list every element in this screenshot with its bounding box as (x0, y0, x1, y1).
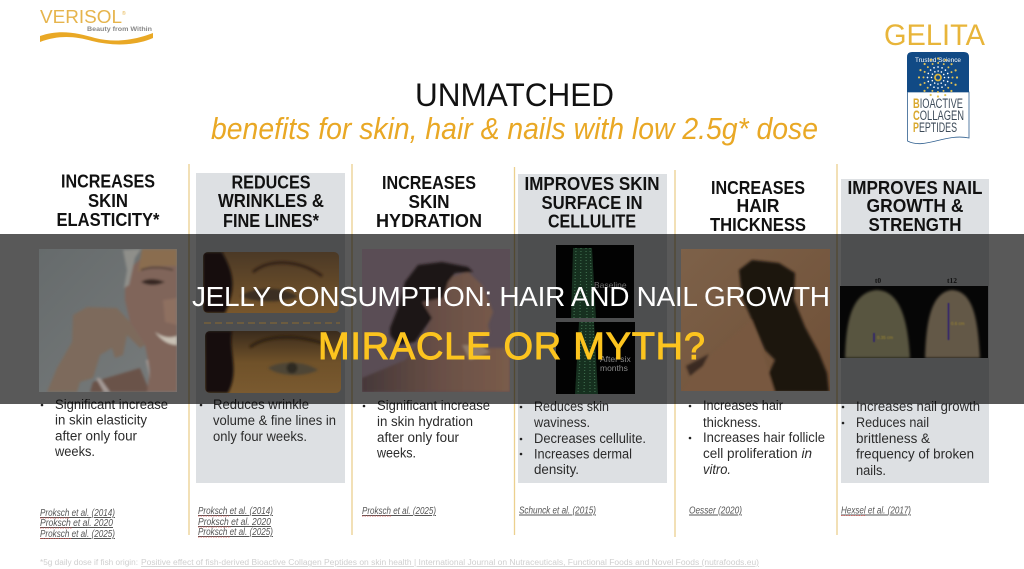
text: skin elasticity bullets: in skin elasticity (55, 412, 147, 428)
photo: nails before and after (840, 276, 988, 358)
heading: increases skin hydration: SKIN (408, 192, 450, 212)
heading: increases hair thickness: HAIR (736, 196, 780, 216)
overlay headline: line 2: MIRACLE OR MYTH? (318, 326, 705, 368)
logo: Gelita with collagen badge: GELITA (884, 19, 985, 52)
references: cellulite: Schunck et al. (2015) (519, 506, 596, 516)
text: nail bullets (842, 399, 980, 478)
footnote: *5g daily dose if fish origin: (40, 558, 138, 567)
text: wrinkles bullets: Reduces wrinkle (213, 397, 309, 412)
heading: reduces wrinkles and fine lines: WRINKLES & (218, 191, 324, 211)
badge: Bioactive Collagen Peptides (907, 52, 969, 144)
heading: increases skin elasticity: INCREASES (61, 172, 155, 192)
text: nail bullets: nails. (856, 463, 886, 478)
text: hair bullets: thickness. (703, 415, 761, 430)
divider: before and after (204, 322, 340, 324)
text: cellulite bullets (520, 399, 646, 477)
references: skin elasticity: Proksch et al. 2020 (40, 518, 113, 529)
badge: Bioactive Collagen Peptides: Trusted Science (915, 57, 961, 64)
text: cellulite bullets: Reduces skin (534, 399, 609, 414)
heading: improves skin surface in cellulite: SURFACE IN (542, 193, 642, 213)
references: wrinkles: Proksch et al. 2020 (198, 517, 271, 528)
badge: Bioactive Collagen Peptides: COLLAGEN (913, 108, 964, 123)
text: wrinkles bullets: volume & fine lines in (213, 413, 336, 428)
heading: improves skin surface in cellulite: CELLULITE (548, 212, 636, 232)
heading: increases skin hydration: INCREASES (382, 173, 476, 193)
photo: nails before and after: 0.35 cm (877, 335, 893, 340)
heading: reduces wrinkles and fine lines: REDUCES (232, 172, 310, 192)
text: nail bullets: Increases nail growth (856, 399, 980, 414)
heading: increases skin hydration: HYDRATION (376, 211, 482, 231)
logo: Verisol: ® (122, 10, 126, 17)
heading: improves nail growth and strength: GROWTH & (866, 196, 964, 216)
text: hair bullets: Increases hair (703, 398, 784, 413)
photo: nails before and after: 0.6 cm (951, 321, 965, 326)
photo: woman with curly hair (681, 249, 830, 392)
title: UNMATCHED (415, 77, 614, 113)
dark title band (0, 234, 1024, 404)
photo: cellulite baseline scan: Baseline (594, 280, 627, 290)
text: cellulite bullets: Increases dermal (534, 446, 632, 462)
references: skin elasticity: Proksch et al. (2014) (40, 508, 115, 519)
badge: Bioactive Collagen Peptides: PEPTIDES (913, 120, 957, 135)
references: wrinkles (198, 506, 273, 538)
text: hair bullets (689, 398, 825, 477)
text: hydration bullets: in skin hydration (377, 414, 473, 429)
text: hydration bullets: weeks. (376, 446, 416, 460)
photo: eye after (205, 331, 341, 393)
heading: improves skin surface in cellulite: IMPROVES SKIN (524, 174, 660, 194)
badge: Bioactive Collagen Peptides: BIOACTIVE (913, 96, 963, 111)
photo: woman touching cheek (39, 249, 177, 392)
heading: improves nail growth and strength (848, 178, 983, 235)
text: nail bullets: frequency of broken (856, 446, 974, 462)
text: hydration bullets: Significant increase (377, 398, 490, 413)
text: cellulite bullets: Decreases cellulite. (534, 431, 646, 446)
footnote: Positive effect of fish-derived Bioactive Collagen Peptides on skin health | International Journal on Nutraceuticals, Functional Foods and Novel Foods (nutrafoods.eu) (141, 558, 759, 567)
text: skin elasticity bullets: weeks. (54, 444, 95, 459)
text: hair bullets: Increases hair follicle (703, 430, 825, 445)
text: nail bullets: Reduces nail (856, 415, 929, 430)
photo: nails before and after: t12 (947, 276, 957, 285)
heading: increases hair thickness (710, 178, 806, 235)
text: hydration bullets: after only four (377, 430, 460, 445)
heading: improves nail growth and strength: STRENGTH (868, 215, 962, 235)
photo: cellulite after six months scan (556, 322, 635, 394)
logo: Verisol: Beauty from Within (87, 26, 152, 33)
logo: Verisol: VERISOL (40, 6, 122, 27)
logo: Gelita with collagen badge (884, 19, 985, 144)
text: wrinkles bullets: only four weeks. (213, 429, 307, 444)
text: hair bullets: cell proliferation in (703, 446, 812, 461)
photo: eye before (203, 252, 339, 313)
text: skin elasticity bullets: Significant increase (55, 397, 168, 412)
overlay headline: line 1: JELLY CONSUMPTION: HAIR AND NAIL GROWTH (192, 281, 830, 312)
heading: increases skin hydration (376, 173, 482, 231)
heading: improves skin surface in cellulite (524, 174, 660, 232)
photo: woman in profile (362, 249, 510, 392)
column dividers (189, 164, 837, 537)
text: skin elasticity bullets: after only four (55, 428, 138, 444)
text: wrinkles bullets (200, 397, 336, 444)
text: hydration bullets (363, 398, 490, 460)
heading: increases skin elasticity: ELASTICITY* (56, 210, 160, 230)
text: nail bullets: brittleness & (856, 431, 930, 446)
photo: nails before and after: t0 (875, 276, 881, 285)
shaded column backgrounds (196, 173, 989, 483)
text: skin elasticity bullets (41, 397, 168, 459)
heading: reduces wrinkles and fine lines (218, 172, 324, 231)
heading: reduces wrinkles and fine lines: FINE LINES* (223, 211, 319, 231)
heading: improves nail growth and strength: IMPROVES NAIL (848, 178, 983, 198)
references: nails: Hexsel et al. (2017) (841, 506, 911, 516)
subtitle: benefits for skin, hair & nails with low 2.5g* dose (211, 111, 818, 146)
photo: cellulite baseline scan (556, 245, 634, 318)
heading: increases hair thickness: THICKNESS (710, 215, 806, 235)
heading: increases skin elasticity (56, 172, 160, 230)
text: cellulite bullets: density. (534, 462, 579, 477)
photo: cellulite after six months scan: months (600, 363, 628, 373)
text: cellulite bullets: waviness. (533, 415, 590, 430)
text: hair bullets: vitro. (703, 462, 731, 477)
references: skin elasticity: Proksch et al. (2025) (40, 529, 115, 540)
references: hydration: Proksch et al. (2025) (362, 506, 436, 517)
heading: increases hair thickness: INCREASES (711, 178, 805, 198)
references: skin elasticity (40, 508, 115, 540)
references: hair: Oesser (2020) (689, 506, 742, 516)
logo: Verisol (40, 6, 153, 44)
heading: increases skin elasticity: SKIN (88, 191, 128, 211)
references: wrinkles: Proksch et al. (2025) (198, 527, 273, 538)
references: wrinkles: Proksch et al. (2014) (198, 506, 273, 517)
photo: cellulite after six months scan: After six (600, 354, 631, 364)
